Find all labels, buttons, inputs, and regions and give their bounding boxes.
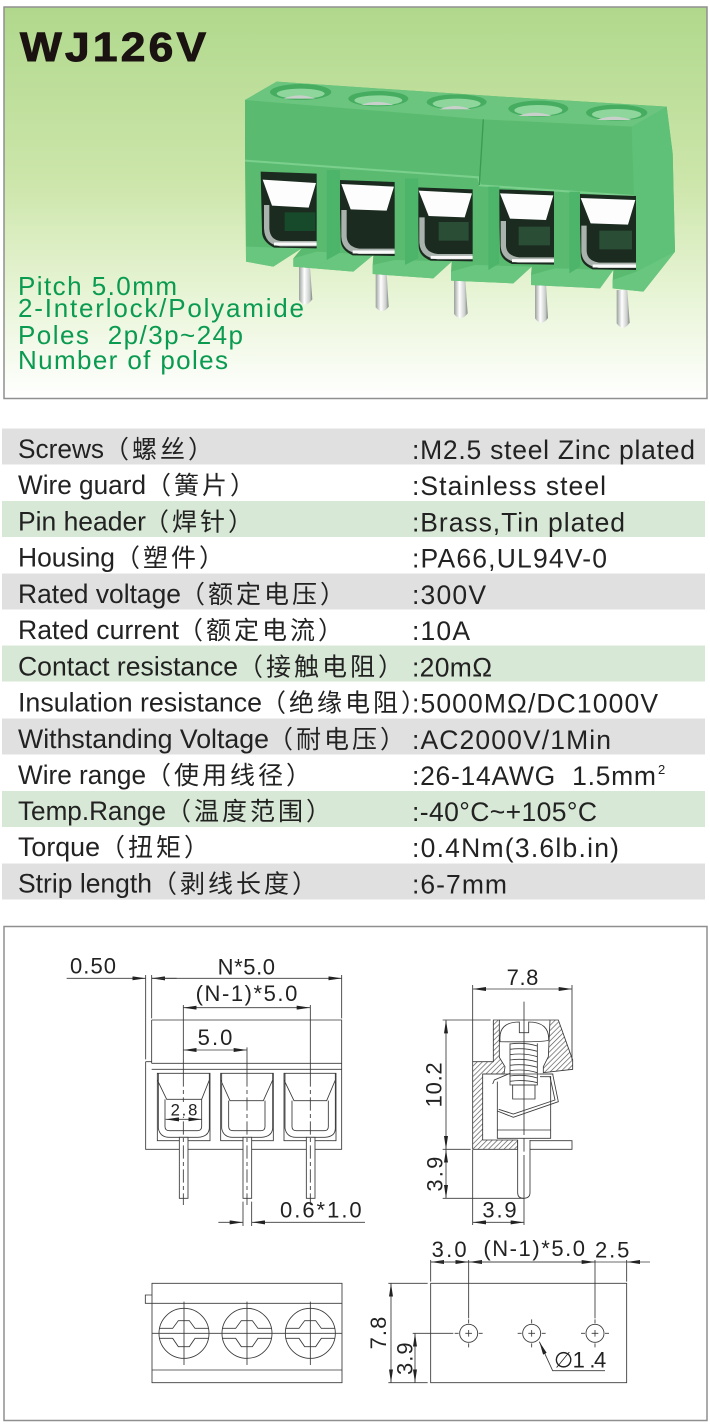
dimension labels: 3.9 xyxy=(482,1198,517,1223)
row: wire range: :26-14AWG 1.5mm xyxy=(412,761,656,791)
dimension labels: 2.5 xyxy=(595,1237,629,1262)
contact cavity 3 xyxy=(417,187,473,261)
right side face xyxy=(632,107,675,292)
drawing: front view xyxy=(67,953,365,1226)
dimension labels: 3.0 xyxy=(432,1237,467,1262)
recess top lip xyxy=(245,161,634,196)
row: wire range xyxy=(18,760,665,791)
screw 3 xyxy=(285,1302,335,1365)
dimension lines xyxy=(388,1260,650,1383)
row: wire range: 2 xyxy=(658,762,665,777)
drawing: side section view xyxy=(421,965,573,1225)
panel: technical drawings xyxy=(4,926,707,1420)
text block: key features: Poles 2p/3p~24p xyxy=(18,320,243,350)
row: wire guard: （簧片） xyxy=(146,472,258,500)
dimension labels: 2.8 xyxy=(171,1101,197,1120)
row: rated voltage xyxy=(2,574,705,610)
row: temp range: Temp.Range xyxy=(18,796,166,826)
housing outline xyxy=(146,1020,342,1205)
dimension lines xyxy=(67,975,365,1226)
row: torque xyxy=(18,832,619,863)
row: torque: （扭矩） xyxy=(100,834,212,862)
row: rated voltage: （额定电压） xyxy=(180,581,348,609)
row: rated current xyxy=(18,615,470,646)
dimension labels: 3.9 xyxy=(392,1342,417,1375)
contact cavity 2 xyxy=(339,180,395,256)
dimension labels: 0.6*1.0 xyxy=(280,1198,362,1223)
dimension lines xyxy=(443,985,572,1225)
screw 1 xyxy=(159,1302,209,1365)
text block: key features xyxy=(18,271,304,375)
dimension labels xyxy=(421,965,538,1223)
row: screws: Screws xyxy=(18,434,104,464)
row: wire guard: Wire guard xyxy=(18,470,146,500)
pins xyxy=(299,267,630,328)
drawing: top view xyxy=(145,1283,342,1383)
row: withstanding voltage: （耐电压） xyxy=(268,726,408,754)
row: torque: :0.4Nm(3.6lb.in) xyxy=(412,833,619,863)
row: pin header xyxy=(2,501,705,538)
row: pin header: （焊针） xyxy=(144,508,256,536)
row: temp range: （温度范围） xyxy=(166,798,334,826)
contact cavity 4 xyxy=(499,189,554,265)
text block: key features: Number of poles xyxy=(18,345,228,375)
row: insulation resistance: :5000MΩ/DC1000V xyxy=(412,688,658,718)
table: specifications xyxy=(2,428,705,900)
seam between modules xyxy=(479,119,483,185)
row: strip length: （剥线长度） xyxy=(152,870,320,898)
dimension labels xyxy=(366,1236,629,1375)
row: temp range: :-40°C~+105°C xyxy=(412,797,597,827)
row: insulation resistance: Insulation resistance xyxy=(18,688,262,718)
top face xyxy=(245,82,667,127)
screw holes xyxy=(270,84,647,121)
row: wire range: （使用线径） xyxy=(146,762,314,790)
row: wire guard: :Stainless steel xyxy=(412,471,606,501)
row: rated voltage: Rated voltage xyxy=(18,579,181,609)
row: screws: :M2.5 steel Zinc plated xyxy=(412,435,695,465)
row: insulation resistance xyxy=(18,688,658,718)
row: housing: Housing xyxy=(18,542,115,572)
row: insulation resistance: （绝缘电阻） xyxy=(261,690,429,718)
dimension labels: 7.8 xyxy=(507,965,538,990)
dimension labels: ∅1.4 xyxy=(554,1347,606,1372)
board outline and holes xyxy=(431,1283,627,1383)
row: withstanding voltage: :AC2000V/1Min xyxy=(412,725,611,755)
row: rated current: （额定电流） xyxy=(178,617,346,645)
row: pin header: :Brass,Tin plated xyxy=(412,508,625,538)
row: contact resistance: （接触电阻） xyxy=(238,654,406,682)
dimension labels: (N-1)*5.0 xyxy=(196,981,297,1006)
row: housing xyxy=(18,542,607,574)
image: green terminal block xyxy=(245,82,675,328)
row: screws xyxy=(2,428,705,465)
dimension labels: N*5.0 xyxy=(218,954,275,979)
row: withstanding voltage xyxy=(2,718,705,755)
contact cavity 5 xyxy=(579,194,636,270)
row: contact resistance: :20mΩ xyxy=(412,652,492,682)
row: contact resistance: Contact resistance xyxy=(18,652,238,682)
contact cavity 1 xyxy=(261,172,317,248)
title: WJ126V xyxy=(20,24,209,71)
row: rated voltage: :300V xyxy=(412,580,486,610)
row: housing: :PA66,UL94V-0 xyxy=(412,544,607,574)
screw 2 xyxy=(222,1302,272,1365)
row: rated current: Rated current xyxy=(18,615,179,645)
row: rated current: :10A xyxy=(412,616,470,646)
dimension labels: (N-1)*5.0 xyxy=(483,1236,585,1261)
dimension labels: 0.50 xyxy=(70,953,116,978)
row: withstanding voltage: Withstanding Voltage xyxy=(18,724,269,754)
row: strip length: Strip length xyxy=(18,868,152,898)
housing body xyxy=(245,82,675,292)
recess side walls xyxy=(327,170,580,273)
dimension labels: 7.8 xyxy=(366,1317,391,1349)
panel: product header xyxy=(4,7,707,398)
row: strip length: :6-7mm xyxy=(412,870,507,900)
row: torque: Torque xyxy=(18,832,100,862)
text block: key features: 2-Interlock/Polyamide xyxy=(18,293,304,323)
row: contact resistance xyxy=(2,646,705,682)
text block: key features: Pitch 5.0mm xyxy=(18,271,177,301)
internals xyxy=(483,1002,572,1198)
row: housing: （塑件） xyxy=(115,544,227,572)
row: strip length xyxy=(2,864,705,900)
row: temp range xyxy=(2,791,705,827)
hatched housing section xyxy=(473,1020,573,1149)
drawing: PCB footprint xyxy=(366,1236,650,1383)
dimension labels xyxy=(70,953,362,1223)
row: wire guard xyxy=(18,470,606,501)
foot top faces xyxy=(246,247,675,292)
dimension labels: 5.0 xyxy=(198,1025,232,1050)
row: pin header: Pin header xyxy=(18,506,146,536)
dimension labels: 3.9 xyxy=(422,1157,447,1192)
dimension labels: 10.2 xyxy=(421,1062,446,1107)
row: wire range: Wire range xyxy=(18,760,146,790)
row: screws: （螺丝） xyxy=(104,436,216,464)
